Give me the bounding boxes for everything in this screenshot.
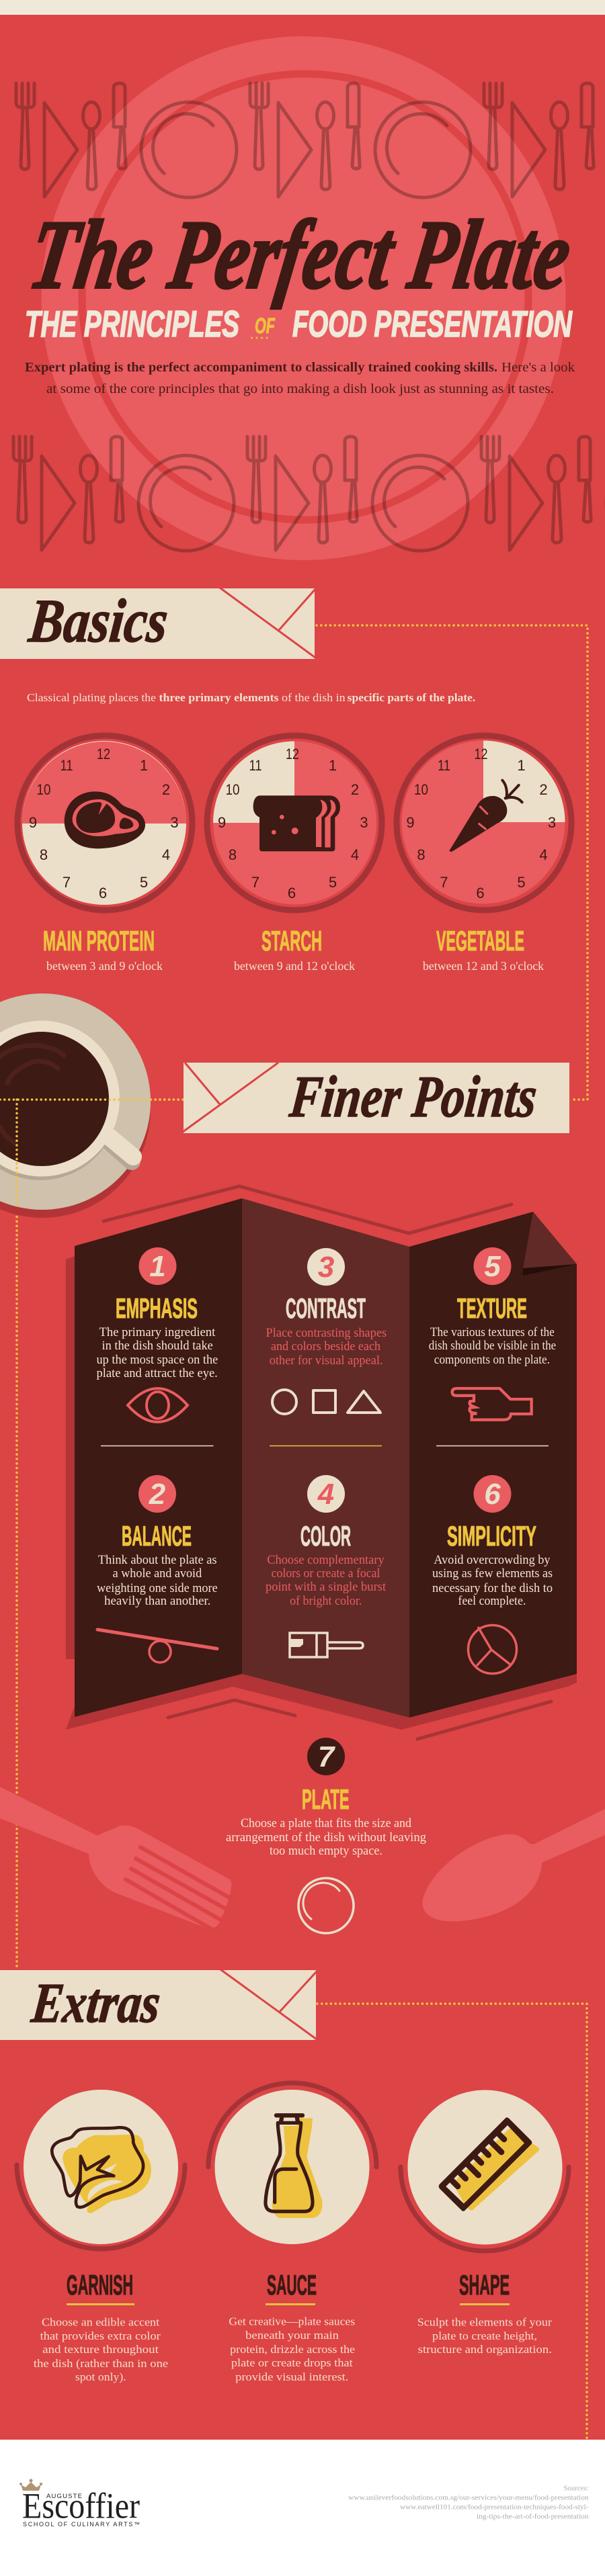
item 5: texture: The various textures of the bbox=[430, 1326, 555, 1339]
clock: starch: 10 bbox=[226, 781, 239, 798]
clock: starch: 2 bbox=[351, 781, 359, 798]
clock: vegetable: 11 bbox=[438, 757, 450, 774]
extra: sauce bbox=[208, 2083, 376, 2383]
clock: starch: 3 bbox=[360, 814, 368, 831]
icon: peace circle bbox=[468, 1626, 516, 1674]
item 2: balance: a whole and avoid bbox=[113, 1567, 202, 1581]
item 1: emphasis: plate and attract the eye. bbox=[97, 1367, 218, 1380]
item 2: balance bbox=[97, 1475, 218, 1662]
clock: vegetable: 4 bbox=[539, 846, 548, 863]
top cream band bbox=[0, 0, 605, 15]
icon: pointing hand bbox=[452, 1388, 532, 1420]
clock: vegetable: 8 bbox=[417, 846, 426, 863]
extra: sauce: beneath your main bbox=[245, 2329, 339, 2342]
clock: main protein: 11 bbox=[61, 757, 73, 774]
clock: starch: 4 bbox=[351, 846, 359, 863]
item 2: balance: 2 bbox=[149, 1478, 166, 1511]
clock: main protein: 5 bbox=[140, 874, 148, 891]
item 7: plate: arrangement of the dish without leaving bbox=[226, 1831, 426, 1845]
subtitle bbox=[25, 303, 573, 345]
icon: crown bbox=[19, 2479, 42, 2491]
row dividers bbox=[101, 1446, 549, 1447]
item 6: simplicity: Avoid overcrowding by bbox=[434, 1554, 551, 1567]
item 1: emphasis: 1 bbox=[149, 1250, 166, 1283]
basics intro line: specific parts of the plate. bbox=[348, 691, 475, 704]
item 6: simplicity: necessary for the dish to bbox=[432, 1582, 553, 1595]
extra: garnish: the dish (rather than in one bbox=[34, 2357, 168, 2370]
item 1: emphasis: The primary ingredient bbox=[99, 1326, 216, 1339]
item 7: plate: PLATE bbox=[302, 1783, 350, 1815]
basics intro line: of the dish in bbox=[282, 691, 346, 704]
extra: garnish: that provides extra color bbox=[40, 2329, 161, 2342]
extra: garnish bbox=[17, 2090, 185, 2383]
sources: www.eatwell101.com/food-presentation-techniques-food-styl- bbox=[400, 2504, 589, 2511]
extra: garnish: and texture throughout bbox=[42, 2343, 159, 2356]
subtitle: THE PRINCIPLES bbox=[25, 303, 239, 345]
subtitle: OF bbox=[255, 314, 276, 338]
extra: garnish: Choose an edible accent bbox=[42, 2316, 159, 2328]
clock: starch: 6 bbox=[288, 885, 296, 901]
clock: main protein: 6 bbox=[99, 885, 107, 901]
item 7: plate bbox=[226, 1738, 426, 1933]
clock: vegetable: 2 bbox=[539, 781, 548, 798]
clock labels: between 9 and 12 o'clock bbox=[234, 959, 355, 973]
clock labels: between 12 and 3 o'clock bbox=[423, 959, 544, 973]
item 4: color bbox=[266, 1475, 387, 1657]
clock: main protein: 8 bbox=[40, 846, 48, 863]
clock: main protein: 12 bbox=[97, 746, 110, 762]
sources: ing-tips-the-art-of-food-presentation bbox=[477, 2514, 589, 2520]
clock: main protein bbox=[17, 736, 192, 910]
intro text: at some of the core principles that go into making a dish look just as stunning as it tastes. bbox=[46, 382, 554, 396]
clock: vegetable: 12 bbox=[475, 746, 488, 762]
sources: www.unileverfoodsolutions.com.sg/our-services/your-menu/food-presentation bbox=[348, 2495, 589, 2501]
sources bbox=[348, 2485, 589, 2520]
extra: shape: Sculpt the elements of your bbox=[417, 2316, 552, 2328]
footer white area bbox=[0, 2440, 605, 2576]
clock: starch: 1 bbox=[329, 757, 337, 774]
folded menu bbox=[66, 1198, 577, 1730]
clock labels bbox=[43, 925, 544, 973]
sources: Sources: bbox=[563, 2485, 589, 2492]
item 7: plate: Choose a plate that fits the size and bbox=[241, 1817, 412, 1830]
extra: sauce: SAUCE bbox=[267, 2269, 317, 2301]
clock: vegetable: 9 bbox=[406, 814, 415, 831]
item 4: color: COLOR bbox=[300, 1520, 351, 1552]
item 2: balance: heavily than another. bbox=[104, 1595, 210, 1608]
item 5: texture: 5 bbox=[484, 1250, 501, 1283]
item 6: simplicity: using as few elements as bbox=[432, 1567, 553, 1581]
extra: sauce: Get creative—plate sauces bbox=[229, 2315, 355, 2328]
clock: vegetable: 6 bbox=[476, 885, 485, 901]
logo: escoffier: Escoffier bbox=[22, 2485, 140, 2526]
clock: starch: 7 bbox=[251, 874, 259, 891]
item 5: texture: TEXTURE bbox=[457, 1292, 527, 1324]
item 2: balance: BALANCE bbox=[122, 1520, 192, 1552]
coffee cup bbox=[0, 993, 151, 1218]
dotted connector lines bbox=[17, 625, 588, 2440]
cutlery pattern bottom row bbox=[13, 437, 605, 551]
banner: extras bbox=[0, 1969, 317, 2040]
header plate background bbox=[42, 36, 566, 560]
item 4: color: of bright color. bbox=[290, 1595, 362, 1608]
logo: escoffier: SCHOOL OF CULINARY ARTS™ bbox=[23, 2521, 140, 2528]
clock labels: between 3 and 9 o'clock bbox=[46, 959, 163, 973]
item 2: balance: Think about the plate as bbox=[98, 1554, 217, 1567]
basics intro line bbox=[27, 691, 475, 704]
clock: main protein: 9 bbox=[29, 814, 37, 831]
item 3: contrast bbox=[266, 1248, 387, 1414]
intro text: Expert plating is the perfect accompaniment to classically trained cooking skills. bbox=[25, 361, 497, 375]
clock labels: VEGETABLE bbox=[436, 925, 524, 957]
extra: shape: structure and organization. bbox=[418, 2343, 552, 2356]
logo: escoffier: AUGUSTE bbox=[46, 2493, 82, 2500]
item 1: emphasis bbox=[97, 1247, 218, 1422]
item 1: emphasis: up the most space on the bbox=[97, 1353, 218, 1367]
clock: vegetable: 1 bbox=[517, 757, 526, 774]
clock: vegetable: 3 bbox=[548, 814, 556, 831]
item 3: contrast: CONTRAST bbox=[286, 1292, 366, 1324]
clock labels: STARCH bbox=[261, 925, 322, 957]
item 6: simplicity: feel complete. bbox=[458, 1595, 526, 1608]
coffee cup dotted overlay bbox=[0, 1100, 183, 1209]
folded menu decorative lines bbox=[104, 1186, 551, 1739]
icon: shapes bbox=[272, 1390, 380, 1414]
clock: vegetable bbox=[397, 736, 571, 910]
clock: main protein: 2 bbox=[162, 781, 170, 798]
banner: finer points bbox=[183, 1063, 569, 1133]
clock: vegetable: 10 bbox=[414, 781, 428, 798]
decorative big spoon bbox=[422, 1809, 605, 1921]
clock labels: MAIN PROTEIN bbox=[43, 925, 155, 957]
intro text: Here's a look bbox=[501, 361, 575, 375]
banner: basics bbox=[0, 586, 315, 659]
icon: carrot bbox=[449, 781, 522, 852]
item 3: contrast: 3 bbox=[318, 1251, 334, 1284]
clock: vegetable: 5 bbox=[517, 874, 526, 891]
item 7: plate: 7 bbox=[318, 1740, 336, 1773]
basics intro line: three primary elements bbox=[159, 691, 279, 704]
item 6: simplicity: SIMPLICITY bbox=[447, 1520, 536, 1552]
item 7: plate: too much empty space. bbox=[270, 1845, 382, 1858]
extra: shape: plate to create height, bbox=[432, 2329, 537, 2342]
extra: shape bbox=[401, 2090, 569, 2356]
item 4: color: colors or create a focal bbox=[272, 1567, 380, 1581]
icon: ruler bbox=[439, 2117, 539, 2211]
banner: basics: Basics bbox=[26, 586, 171, 655]
icon: bread bbox=[253, 795, 340, 851]
clock: starch: 9 bbox=[218, 814, 226, 831]
extra: garnish: GARNISH bbox=[67, 2269, 133, 2301]
extra: sauce: provide visual interest. bbox=[235, 2370, 348, 2383]
item 6: simplicity bbox=[432, 1475, 553, 1674]
clock: vegetable: 7 bbox=[440, 874, 448, 891]
cutlery pattern top row bbox=[16, 83, 605, 197]
clock: main protein: 4 bbox=[162, 846, 170, 863]
clock: starch: 12 bbox=[286, 746, 299, 762]
clock: starch: 11 bbox=[249, 757, 262, 774]
clock: starch: 5 bbox=[329, 874, 337, 891]
item 1: emphasis: EMPHASIS bbox=[116, 1292, 198, 1324]
icon: paint brush bbox=[290, 1633, 363, 1657]
extra: shape: SHAPE bbox=[459, 2269, 510, 2301]
clock: main protein: 10 bbox=[36, 781, 51, 798]
item 2: balance: weighting one side more bbox=[97, 1582, 218, 1595]
icon: sauce bottle bbox=[266, 2115, 322, 2218]
clock: main protein: 7 bbox=[63, 874, 71, 891]
item 5: texture: components on the plate. bbox=[434, 1353, 550, 1367]
basics intro line: Classical plating places the bbox=[27, 691, 156, 704]
decorative big fork bbox=[0, 1787, 235, 1933]
item 1: emphasis: in the dish should take bbox=[102, 1339, 213, 1353]
clock: main protein: 3 bbox=[170, 814, 179, 831]
clock: main protein: 1 bbox=[140, 757, 148, 774]
item 5: texture: dish should be visible in the bbox=[429, 1339, 556, 1353]
extra: garnish: spot only). bbox=[75, 2370, 126, 2383]
icon: eye bbox=[128, 1388, 188, 1422]
item 3: contrast: and colors beside each bbox=[271, 1340, 380, 1353]
item 3: contrast: Place contrasting shapes bbox=[266, 1327, 387, 1340]
banner: extras: Extras bbox=[28, 1972, 163, 2035]
item 4: color: 4 bbox=[317, 1478, 334, 1511]
extra: sauce: protein, drizzle across the bbox=[230, 2343, 355, 2356]
item 5: texture bbox=[429, 1247, 556, 1420]
item 6: simplicity: 6 bbox=[484, 1478, 501, 1511]
clock: starch: 8 bbox=[229, 846, 237, 863]
clock: starch bbox=[207, 736, 382, 910]
item 3: contrast: other for visual appeal. bbox=[270, 1354, 383, 1368]
icon: steak bbox=[65, 791, 145, 848]
banner: finer points: Finer Points bbox=[286, 1064, 540, 1130]
icon: garnish leaf bbox=[52, 2127, 151, 2213]
item 4: color: point with a single burst bbox=[266, 1581, 387, 1594]
intro text bbox=[25, 361, 575, 396]
item 4: color: Choose complementary bbox=[267, 1554, 385, 1567]
icon: seesaw bbox=[97, 1630, 217, 1662]
extra: sauce: plate or create drops that bbox=[231, 2356, 353, 2369]
icon: plate bbox=[298, 1878, 354, 1933]
